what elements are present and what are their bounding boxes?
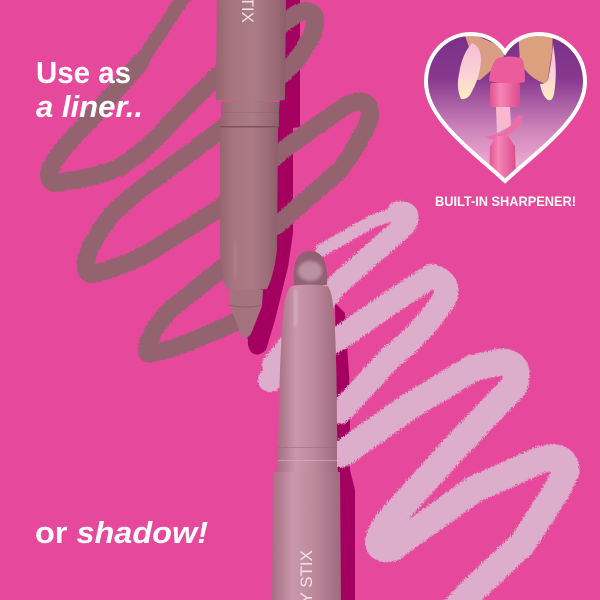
liner body — [216, 0, 286, 102]
heart outline — [426, 34, 585, 181]
pink sharpener cap — [489, 56, 525, 84]
liner pencil — [216, 0, 286, 338]
heading: use as a liner — [36, 55, 143, 124]
left finger — [465, 36, 504, 80]
shadow stick — [272, 251, 341, 600]
stick body — [272, 472, 341, 600]
pink pencil — [489, 136, 516, 180]
liner pencil shadow — [238, 0, 300, 355]
stick crayon tip — [294, 251, 327, 285]
right finger — [518, 36, 553, 84]
liner lower barrel — [220, 127, 278, 290]
caption: built-in sharpener: BUILT-IN SHARPENER! — [435, 193, 576, 209]
heart background — [426, 34, 585, 181]
liner tip — [229, 290, 263, 338]
heading: use as a liner: Use as — [36, 55, 131, 90]
heart inset — [426, 30, 585, 181]
right nail — [540, 44, 556, 100]
stick barrel — [278, 284, 337, 447]
shavings — [496, 107, 511, 133]
heading: use as a liner: a liner.. — [36, 89, 143, 124]
stick collar — [278, 447, 337, 472]
shadow stick shadow — [335, 303, 355, 600]
liner swatch stroke — [49, 0, 370, 354]
heading: or shadow: or shadow! — [35, 515, 208, 550]
liner collar — [221, 102, 279, 127]
shadow swatch stroke — [270, 212, 566, 600]
left nail — [458, 43, 481, 99]
